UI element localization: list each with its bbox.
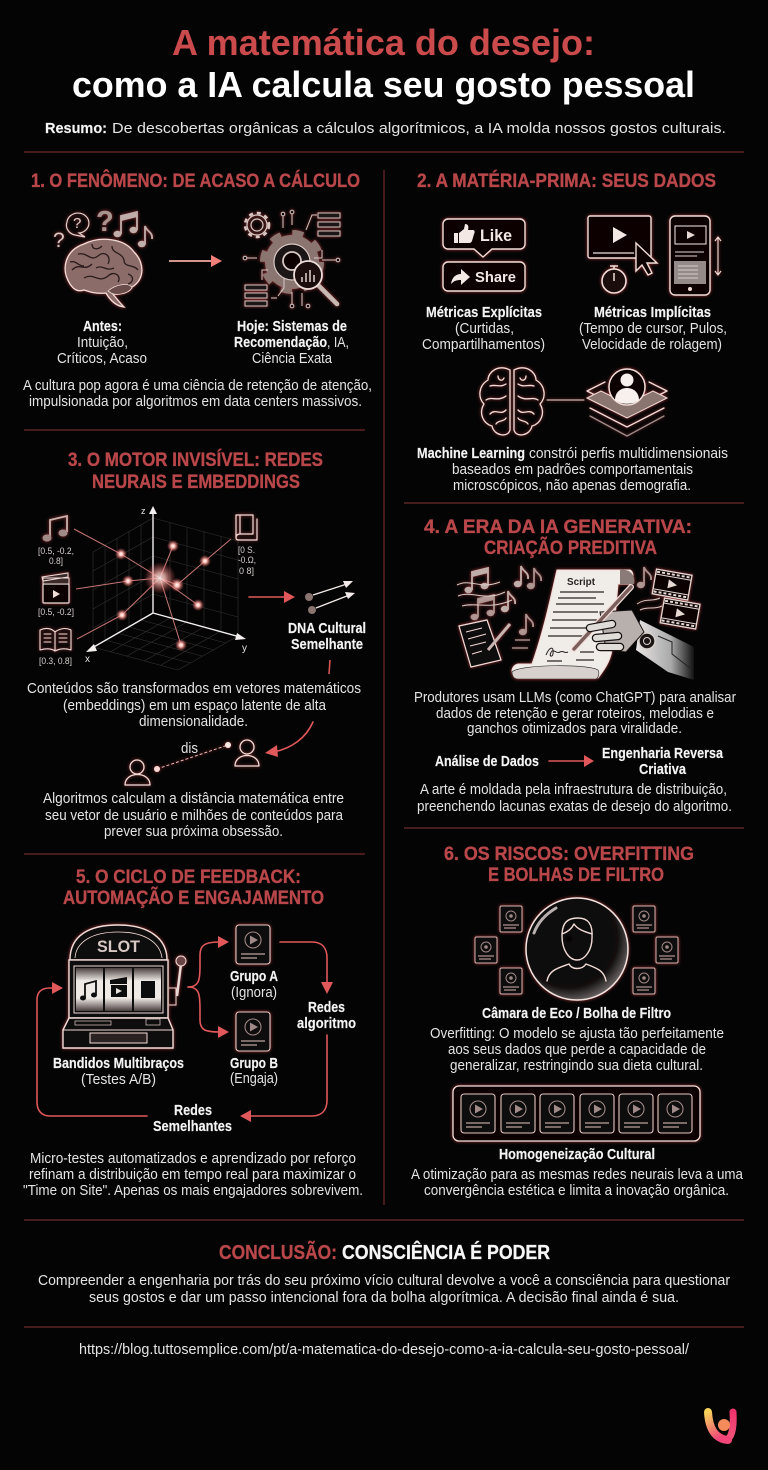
text block 2 — [417, 445, 728, 494]
icon: filter bubble with content cards — [475, 898, 678, 1000]
label explicitas: Compartilhamentos) — [422, 336, 545, 353]
text block 6a: generalizar, restringindo sua dieta cultural. — [450, 1057, 703, 1074]
icon: brain with questions and music: ? — [73, 215, 81, 232]
label hoje: , IA, — [327, 334, 349, 351]
heading 5: 5. O CICLO DE FEEDBACK: — [76, 866, 301, 888]
text block 2: Machine Learning — [417, 445, 525, 462]
text block 4a — [414, 689, 736, 737]
label hoje: Ciência Exata — [252, 350, 333, 367]
label camara de eco: Câmara de Eco / Bolha de Filtro — [482, 1005, 671, 1022]
panel: 5 ciclo de feedback — [23, 866, 363, 1199]
vector label music — [38, 546, 74, 566]
icon: brain with questions and music: ? — [96, 206, 114, 238]
heading 2: 2. A MATÉRIA-PRIMA: SEUS DADOS — [417, 169, 716, 192]
source url: https://blog.tuttosemplice.com/pt/a-matematica-do-desejo-como-a-ia-calcula-seu-gosto-pessoal/ — [79, 1341, 690, 1358]
text block 4a: Produtores usam LLMs (como ChatGPT) para analisar — [414, 689, 736, 706]
text block 2: baseados em padrões comportamentais — [452, 461, 693, 478]
heading 3: NEURAIS E EMBEDDINGS — [92, 471, 300, 493]
heading 3: 3. O MOTOR INVISÍVEL: REDES — [68, 448, 323, 471]
icon: like and share buttons: Share — [475, 269, 516, 286]
text block 1 — [23, 377, 372, 410]
title line 1: A matemática do desejo: — [172, 22, 595, 63]
label grupo a: (Ignora) — [231, 984, 277, 1001]
text block 5: Micro-testes automatizados e aprendizado por reforço — [30, 1150, 356, 1167]
arrows: branch to groups — [188, 936, 229, 1038]
text block 6a: aos seus dados que perde a capacidade de — [448, 1041, 706, 1058]
conclusion text: Compreender a engenharia por trás do seu próximo vício cultural devolve a você a consciência para questionar — [38, 1272, 730, 1289]
label bandidos — [53, 1055, 184, 1088]
icon: row of identical content cards — [453, 1086, 700, 1141]
heading 5: AUTOMAÇÃO E ENGAJAMENTO — [63, 886, 324, 909]
label grupo a — [230, 968, 278, 1001]
heading 6: E BOLHAS DE FILTRO — [488, 864, 664, 886]
arrow: back to slot machine — [37, 982, 147, 1116]
label antes: Antes: — [83, 318, 122, 335]
text block 2: constrói perfis multidimensionais — [529, 445, 728, 462]
chart: 3d embedding space — [74, 506, 247, 670]
label implicitas: Velocidade de rolagem) — [582, 336, 722, 353]
arrow to dna — [249, 591, 295, 603]
label hoje: Hoje: Sistemas de — [237, 318, 347, 335]
conclusion heading: CONSCIÊNCIA É PODER — [342, 1240, 550, 1264]
vector label book: [0.3, 0.8] — [39, 656, 72, 666]
flow: analise to engenharia: Criativa — [639, 761, 687, 778]
panel: 2 materia-prima — [417, 169, 728, 494]
heading 6: 6. OS RISCOS: OVERFITTING — [444, 843, 694, 865]
label grupo b: (Engaja) — [230, 1070, 278, 1087]
text block 6b: convergência estética e limita a inovação orgânica. — [424, 1182, 729, 1199]
icon: open book — [40, 629, 71, 651]
text block 6a — [430, 1025, 724, 1074]
label antes — [57, 318, 147, 367]
chart: 3d embedding space: x — [85, 654, 90, 665]
chart: 3d embedding space: z — [141, 506, 146, 516]
panel: 6 riscos — [411, 843, 744, 1199]
text block 3a: (embeddings) em um espaço latente de alta — [63, 697, 327, 714]
text block 3a — [27, 680, 361, 730]
conclusion text — [38, 1272, 730, 1306]
heading 4 — [424, 516, 692, 559]
heading 3 — [68, 448, 323, 493]
title line 2: como a IA calcula seu gosto pessoal — [72, 64, 695, 105]
label redes semelhantes — [153, 1102, 232, 1135]
panel: 4 ia generativa — [414, 516, 736, 815]
label redes semelhantes: Semelhantes — [153, 1118, 232, 1135]
icon: brain with questions and music — [53, 206, 152, 307]
text block 6b — [411, 1166, 744, 1199]
label redes algoritmo: Redes — [308, 999, 345, 1016]
icon: like and share buttons: Like — [480, 226, 512, 245]
label antes: Críticos, Acaso — [57, 350, 147, 367]
flow: analise to engenharia — [435, 745, 724, 778]
label implicitas: (Tempo de cursor, Pulos, — [579, 320, 727, 337]
label dis: dis — [181, 740, 198, 757]
illustration: script and robot hand: Script — [567, 576, 595, 588]
label explicitas — [422, 304, 545, 353]
chart: 3d embedding space: y — [242, 643, 247, 654]
arrow: back to semelhantes — [240, 1035, 327, 1122]
label dna: DNA Cultural — [288, 620, 366, 637]
summary: De descobertas orgânicas a cálculos algorítmicos, a IA molda nossos gostos culturais. — [112, 120, 726, 137]
label antes: Intuição, — [77, 334, 128, 351]
label dna — [288, 620, 366, 653]
vector label book right: -0.Ω, — [238, 555, 256, 565]
vector label clapper: [0.5, -0.2] — [38, 607, 74, 617]
icon: slot machine — [63, 925, 186, 1048]
vector label book right: 0 8] — [239, 566, 254, 576]
label grupo a: Grupo A — [230, 968, 278, 985]
icon: logo — [708, 1412, 733, 1440]
label implicitas: Métricas Implícitas — [594, 304, 711, 321]
panel: 3 motor invisivel — [27, 448, 366, 840]
icon: brain line art to user profile layers — [480, 368, 667, 436]
text block 3b: seu vetor de usuário e milhões de conteúdos para — [45, 807, 344, 824]
conclusion text: seus gostos e dar um passo intencional fora da bolha algorítmica. A decisão final ainda é sua. — [89, 1289, 679, 1306]
text block 4a: ganchos otimizados para viralidade. — [467, 720, 682, 737]
panel: conclusao — [38, 1240, 730, 1306]
arrow: to redes algoritmo — [280, 942, 333, 994]
label grupo b — [230, 1055, 278, 1087]
label hoje: Recomendação — [234, 334, 327, 351]
label bandidos: (Testes A/B) — [81, 1071, 156, 1088]
text block 3b: Algoritmos calculam a distância matemática entre — [43, 790, 344, 807]
label dna: Semelhante — [291, 636, 363, 653]
label bandidos: Bandidos Multibraços — [53, 1055, 184, 1072]
text block 3b: prever sua próxima obsessão. — [104, 823, 283, 840]
text block 3a: Conteúdos são transformados em vetores matemáticos — [27, 680, 361, 697]
icon: gear with magnifier and circuits — [243, 210, 340, 308]
text block 3a: dimensionalidade. — [139, 713, 248, 730]
flow: analise to engenharia: Engenharia Reversa — [602, 745, 724, 762]
icon: brain with questions and music: ? — [53, 229, 65, 252]
panel: 1 o fenomeno — [23, 168, 372, 410]
vector label book right: [0 S. — [238, 545, 255, 555]
icon: video player, cursor, stopwatch, phone — [588, 216, 721, 295]
icon: similar vectors — [305, 581, 355, 614]
vector label music: [0.5, -0.2, — [38, 546, 74, 556]
heading 5 — [63, 866, 324, 909]
card grupo b — [236, 1012, 270, 1051]
arrow curved to user — [265, 722, 313, 757]
text block 4b — [417, 781, 732, 815]
header — [45, 22, 726, 137]
heading 1: 1. O FENÔMENO: DE ACASO A CÁLCULO — [31, 168, 360, 192]
illustration: script and robot hand — [457, 566, 700, 680]
icon: clapperboard — [42, 573, 69, 603]
label redes algoritmo: algoritmo — [297, 1015, 356, 1032]
heading 4: CRIAÇÃO PREDITIVA — [484, 536, 657, 559]
text block 1: impulsionada por algoritmos em data centers massivos. — [29, 393, 362, 410]
text block 5 — [23, 1150, 363, 1199]
summary: Resumo: — [45, 120, 107, 137]
label explicitas: Métricas Explícitas — [426, 304, 542, 321]
text block 5: "Time on Site". Apenas os mais engajadores sobrevivem. — [23, 1182, 363, 1199]
icon: like and share buttons — [443, 219, 525, 291]
conclusion heading: CONCLUSÃO: — [219, 1241, 337, 1264]
conclusion heading — [219, 1240, 550, 1264]
label homogeneizacao: Homogeneização Cultural — [499, 1146, 655, 1163]
label grupo b: Grupo B — [230, 1055, 278, 1072]
label redes algoritmo — [297, 999, 356, 1032]
card grupo a — [236, 925, 270, 964]
text block 3b — [43, 790, 344, 840]
label hoje — [234, 318, 349, 367]
vector label music: 0.8] — [49, 556, 63, 566]
heading 6 — [444, 843, 694, 886]
text block 4b: preenchendo lacunas exatas de desejo do algoritmo. — [417, 798, 732, 815]
text block 2: microscópicos, não apenas demografia. — [453, 477, 691, 494]
heading 4: 4. A ERA DA IA GENERATIVA: — [424, 516, 692, 538]
text block 1: A cultura pop agora é uma ciência de retenção de atenção, — [23, 377, 372, 394]
label redes semelhantes: Redes — [174, 1102, 212, 1119]
arrow — [169, 255, 222, 267]
label explicitas: (Curtidas, — [455, 320, 514, 337]
vector label book right — [238, 545, 256, 576]
text block 4b: A arte é moldada pela infraestrutura de distribuição, — [420, 781, 727, 798]
text block 6a: Overfitting: O modelo se ajusta tão perfeitamente — [430, 1025, 724, 1042]
icon: users with distance — [125, 740, 259, 785]
icon: music note — [42, 516, 68, 542]
flow: analise to engenharia: Análise de Dados — [435, 753, 539, 770]
text block 5: refinam a distribuição em tempo real para maximizar o — [29, 1166, 356, 1183]
icon: slot machine: SLOT — [97, 937, 141, 956]
label implicitas — [579, 304, 727, 353]
icon: closed book — [236, 515, 257, 540]
text block 4a: dados de retenção e gerar roteiros, melodias e — [436, 705, 714, 722]
